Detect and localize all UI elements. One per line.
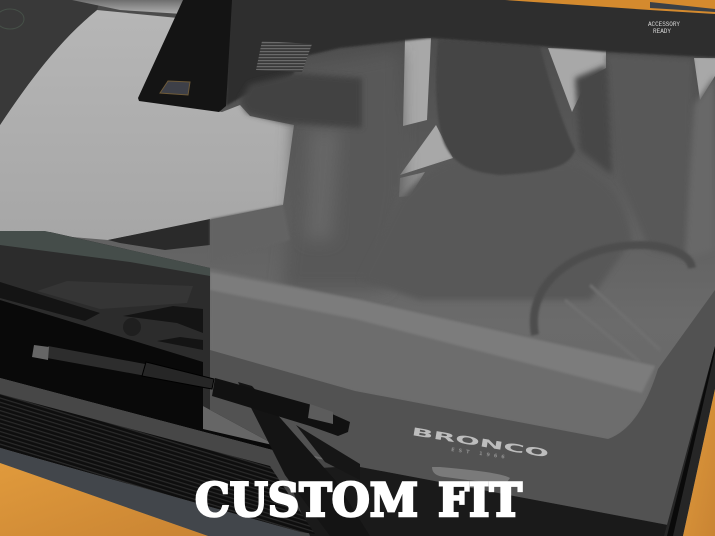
arm end cap bbox=[308, 404, 333, 424]
mirror bbox=[240, 73, 362, 128]
cowl mesh bbox=[0, 394, 315, 534]
Bronco logo bbox=[411, 425, 550, 461]
wiper blade front bbox=[47, 346, 146, 376]
blade mount bbox=[142, 362, 214, 389]
dark strip at the top of the clear dash bbox=[108, 219, 210, 250]
orange right body bbox=[683, 389, 715, 536]
wiper blade rear bbox=[212, 378, 350, 436]
small glass badge bbox=[432, 467, 510, 485]
accessory ready label: READY bbox=[653, 28, 671, 35]
sky through windshield bbox=[0, 10, 294, 240]
Bronco logo: EST 1966 bbox=[451, 447, 506, 461]
rear-view mirror sensor housing bbox=[138, 0, 232, 112]
frit band, tinted side bbox=[210, 290, 715, 525]
accessory ready label: ACCESSORY bbox=[648, 21, 680, 28]
dashboard, tinted side bbox=[210, 268, 655, 439]
steering wheel bbox=[534, 245, 692, 362]
top-left pillar bbox=[0, 0, 100, 125]
grey cowl strip bbox=[0, 378, 360, 536]
wiper arm lower link bbox=[296, 425, 360, 480]
right pillar bbox=[664, 346, 715, 536]
orange roof edge bbox=[505, 0, 650, 10]
green logo mark on pillar bbox=[0, 9, 24, 29]
dash vent and tray details bbox=[0, 282, 203, 350]
orange hood bbox=[0, 463, 208, 536]
title: FIT bbox=[438, 473, 522, 527]
dash panel bbox=[37, 281, 193, 309]
speckled vent bbox=[256, 41, 312, 72]
dashboard, clear side bbox=[0, 232, 210, 420]
black frit, left of film edge bbox=[0, 300, 280, 452]
blade end cap bbox=[32, 345, 49, 360]
top frit band bbox=[226, 0, 715, 106]
lower trim strip bbox=[0, 448, 300, 536]
roof trim bbox=[72, 0, 185, 14]
clear-side grey wedge bbox=[203, 406, 277, 446]
sky patches behind seats bbox=[399, 38, 715, 197]
cowl black base bbox=[285, 466, 668, 536]
accessory ready label bbox=[648, 21, 680, 35]
Bronco logo: BRONCO bbox=[411, 425, 550, 460]
wiper bbox=[32, 345, 370, 536]
dash top edge bbox=[0, 231, 210, 276]
title: CUSTOM bbox=[195, 473, 418, 527]
wiper arm bbox=[238, 382, 370, 536]
sensor window bbox=[160, 81, 190, 95]
interior: pillar, seat and headrest bbox=[282, 40, 715, 300]
